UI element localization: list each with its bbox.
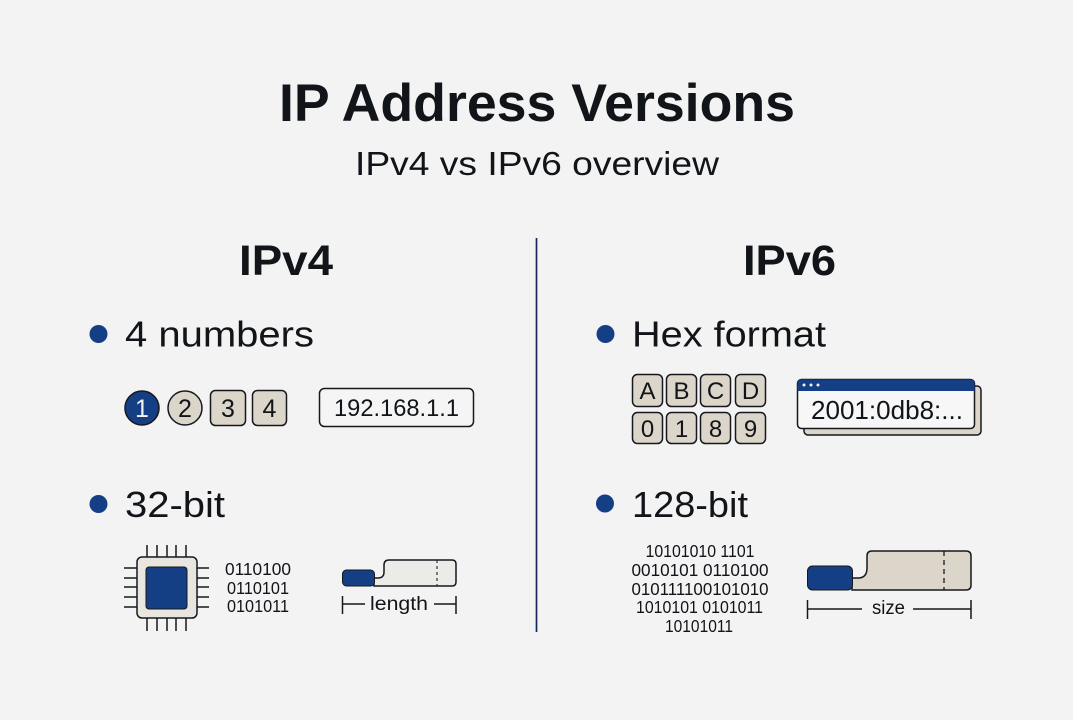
hex keys: B	[673, 378, 690, 405]
hex keys: 8	[709, 416, 722, 443]
IPv6 address window: 2001:0db8:...	[811, 395, 963, 425]
size diagram: size	[872, 598, 905, 619]
binary text 128-bit: 010111100101010	[632, 579, 769, 599]
number tokens: 3	[221, 395, 235, 423]
length diagram	[342, 560, 456, 615]
binary text 128-bit: 10101011	[665, 616, 733, 636]
length diagram: length	[370, 593, 428, 615]
number tokens: 1	[135, 395, 149, 423]
bullet: Hex format: Hex format	[632, 314, 826, 354]
binary text 128-bit: 10101010 1101	[646, 541, 754, 561]
binary text 128-bit: 1010101 0101011	[636, 597, 763, 617]
panel: IPv6	[596, 237, 981, 636]
bullet: 32-bit: 32-bit	[125, 484, 225, 525]
hex keys: C	[707, 378, 724, 405]
IPv4 address box: 192.168.1.1	[334, 395, 459, 422]
size diagram	[808, 551, 971, 619]
binary text 32-bit: 0101011	[227, 596, 289, 616]
bullet: 4 numbers: 4 numbers	[125, 314, 314, 354]
center divider	[536, 238, 538, 632]
hex keys: D	[742, 378, 759, 405]
binary text 32-bit: 0110101	[227, 578, 289, 598]
hex keys: 1	[675, 416, 688, 443]
binary text 32-bit: 0110100	[225, 559, 291, 579]
subtitle: IPv4 vs IPv6 overview	[355, 146, 720, 183]
IPv4 heading: IPv4	[239, 237, 333, 285]
binary text 32-bit	[225, 559, 291, 616]
panel: IPv4	[90, 237, 474, 631]
number tokens: 2	[178, 395, 192, 423]
icon: chip	[124, 545, 209, 631]
title: IP Address Versions	[279, 74, 795, 133]
binary text 128-bit	[632, 541, 769, 636]
hex keys: A	[639, 378, 656, 405]
IPv6 address window	[798, 380, 981, 435]
hex keys	[632, 374, 766, 444]
hex keys: 9	[744, 416, 757, 443]
bullet: 32-bit	[90, 484, 225, 525]
number tokens: 4	[263, 395, 277, 423]
bullet: 128-bit: 128-bit	[632, 484, 748, 525]
binary text 128-bit: 0010101 0110100	[632, 560, 769, 580]
IPv4 address box	[320, 388, 474, 426]
number tokens	[125, 390, 286, 426]
IPv6 heading: IPv6	[743, 237, 836, 285]
hex keys: 0	[641, 416, 654, 443]
